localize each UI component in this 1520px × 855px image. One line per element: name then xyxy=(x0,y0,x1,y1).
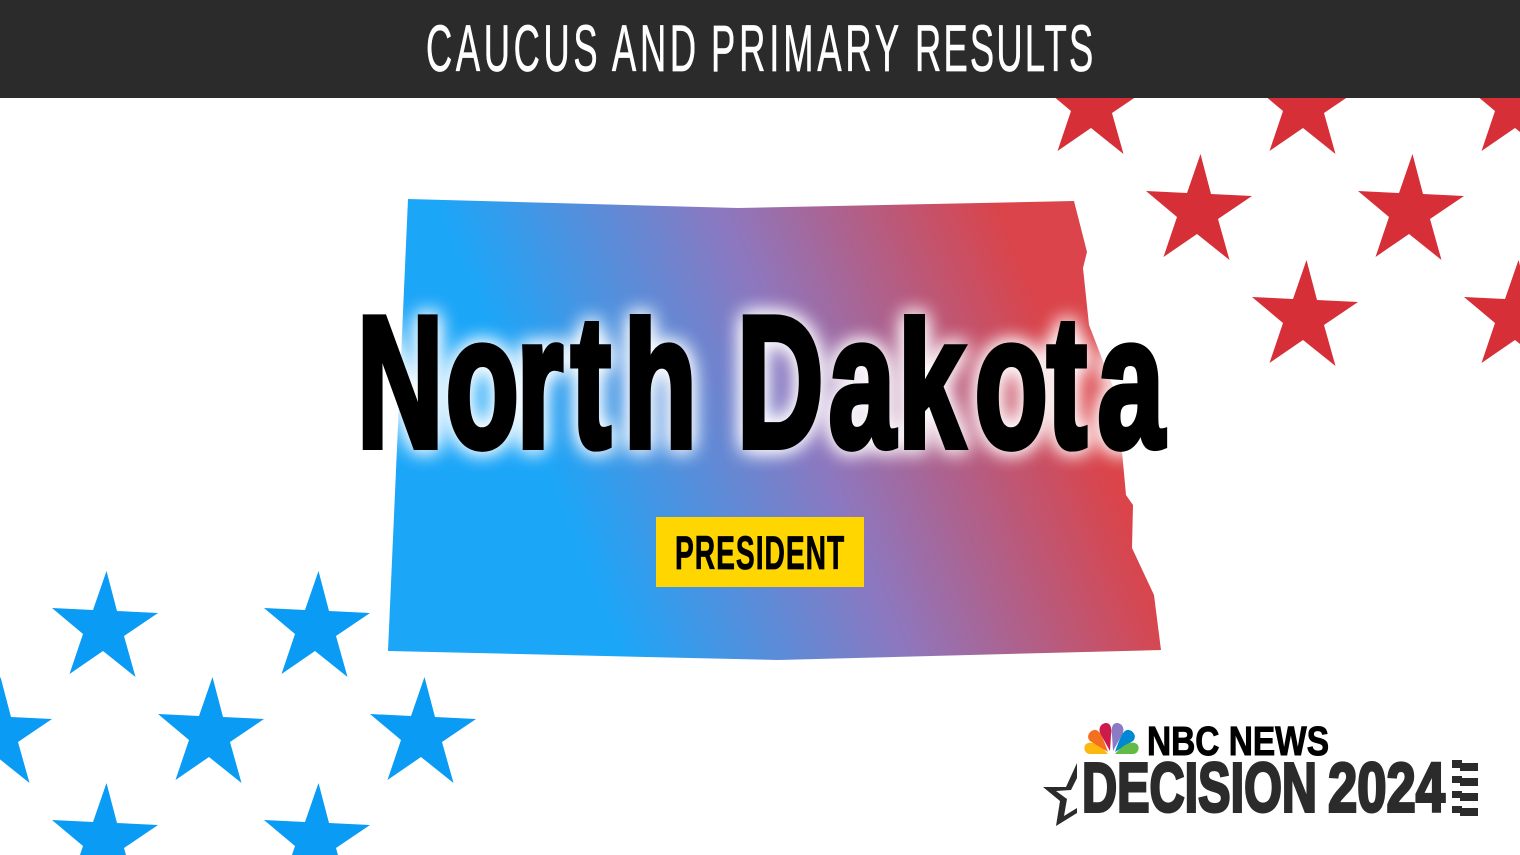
icon: logo stripes xyxy=(1452,760,1478,816)
icon: logo star xyxy=(1043,763,1077,826)
header bar xyxy=(0,0,1520,98)
title xyxy=(426,13,1093,86)
icon: peacock xyxy=(1084,723,1139,754)
title: AND xyxy=(612,13,696,86)
logo: NBC News: NBC NEWS xyxy=(1147,718,1329,764)
North Dakota state map xyxy=(388,199,1161,660)
title: RESULTS xyxy=(915,13,1093,86)
red stars xyxy=(1040,48,1520,366)
title: PRIMARY xyxy=(711,13,899,86)
title: CAUCUS xyxy=(426,13,598,86)
state name heading: North Dakota xyxy=(357,279,1165,487)
president badge xyxy=(656,517,864,587)
president badge: PRESIDENT xyxy=(675,528,844,580)
logo: Decision 2024: 2024 xyxy=(1328,748,1445,826)
logo: Decision 2024: DECISION xyxy=(1082,748,1317,826)
blue stars xyxy=(0,571,476,855)
NBC News Decision 2024 logo xyxy=(1043,718,1478,826)
